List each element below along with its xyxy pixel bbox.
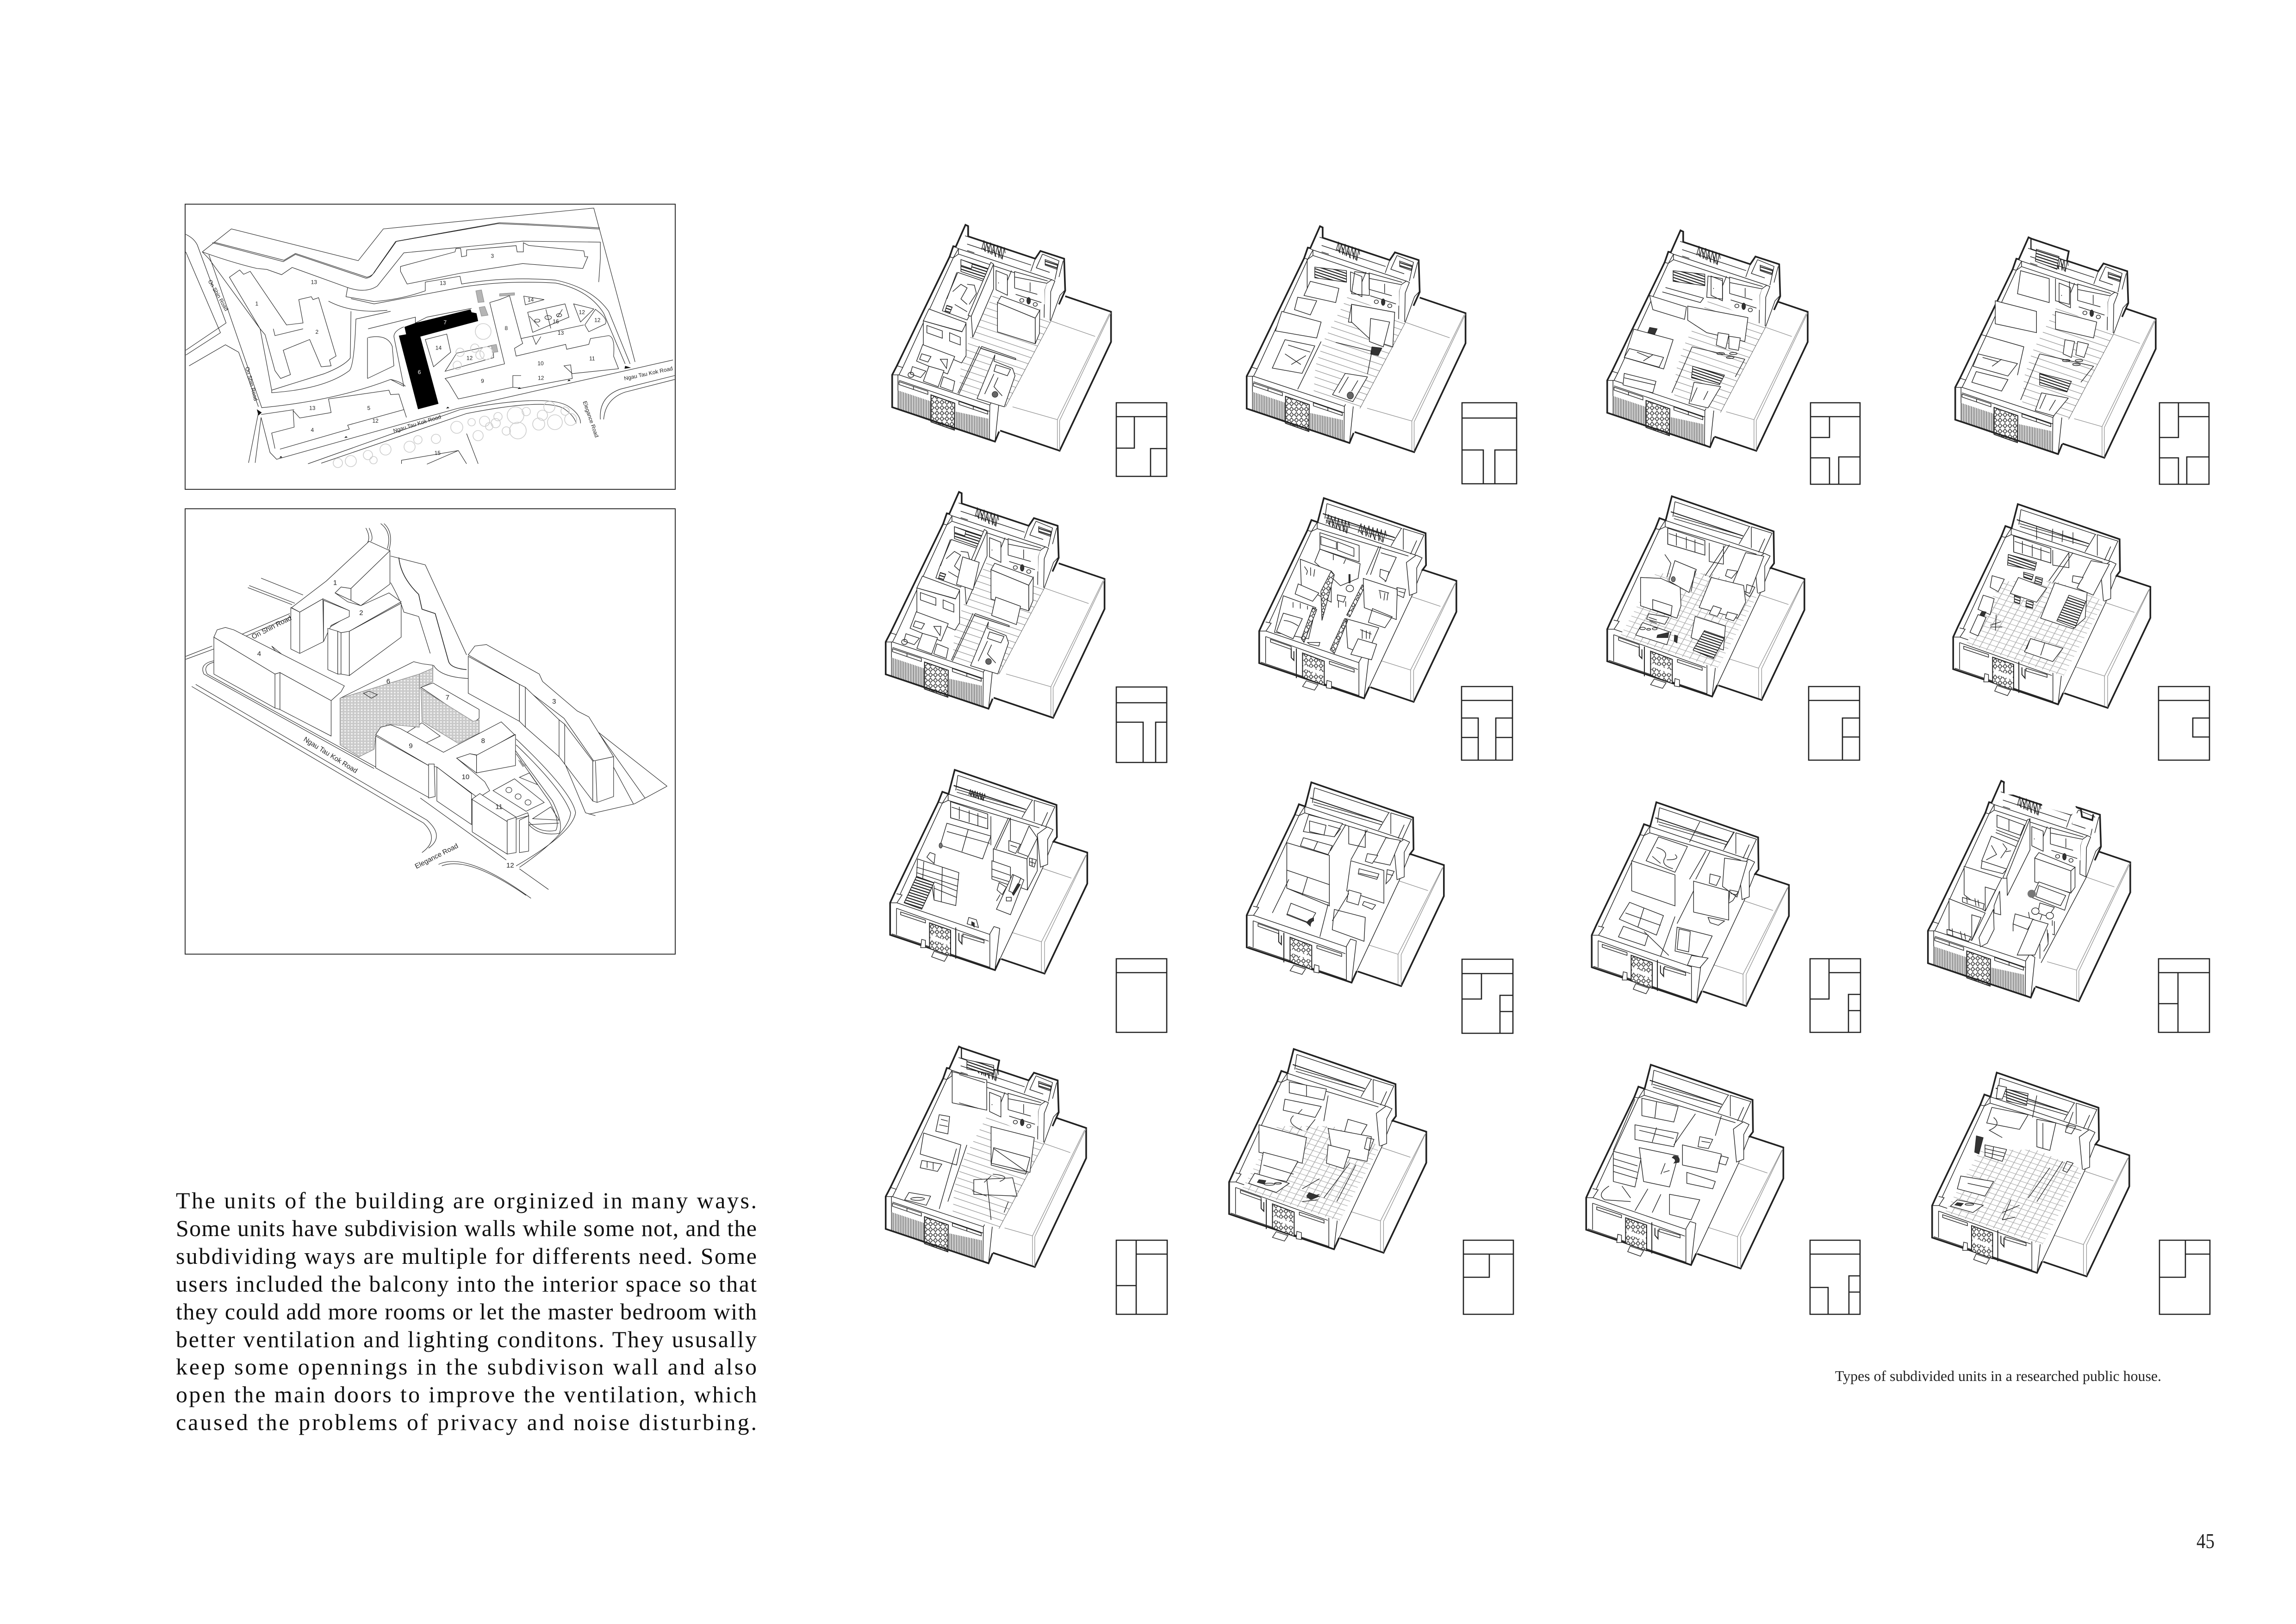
unit 6 axonometric [1259,498,1456,702]
site plan labels: 4 [311,427,314,433]
unit 14 axonometric [1229,1049,1426,1253]
aerial labels: 1 [333,579,337,587]
site plan labels: 6 [418,369,421,375]
unit 9 axonometric [890,770,1087,974]
text block: description of unit organisation [176,1187,757,1435]
aerial block 4 [214,627,344,736]
text block: description of unit organisation: subdividing ways are multiple for differents need. Some [176,1243,757,1269]
unit 1 axonometric [892,225,1111,451]
unit 11 plan [1810,959,1860,1032]
unit 13 plan [1116,1240,1167,1314]
unit 3 plan [1811,403,1860,484]
site plan labels: 12 [467,355,473,362]
panel: aerial axonometric of estate [185,509,675,954]
unit 13 axonometric [886,1047,1086,1267]
unit 4 axonometric [1955,237,2156,458]
text block: description of unit organisation: users included the balcony into the interior space so that [176,1271,757,1297]
unit 3 axonometric [1607,231,1808,451]
site plan labels: 3 [491,253,494,259]
unit 6 plan [1462,687,1512,760]
unit 12 plan [2159,959,2209,1032]
unit 7 axonometric [1607,496,1804,700]
site plan labels: 12 [594,317,601,324]
entrance arrows [257,366,631,458]
unit 1 plan [1116,403,1167,476]
aerial labels: 9 [409,742,413,750]
highlighted building block [399,309,478,409]
panel: site plan map: Elegance Road [582,400,600,438]
unit 11 axonometric [1592,802,1789,1006]
unit 8 plan [2159,687,2209,760]
site plan labels: 10 [537,360,544,367]
site plan labels: 13 [440,280,446,287]
aerial block 3 [468,644,614,802]
unit 14 plan [1463,1240,1513,1314]
unit 7 plan [1809,687,1860,760]
aerial labels: 10 [462,773,469,781]
site plan labels: 16 [553,319,559,325]
site plan labels [255,253,601,456]
aerial labels: 4 [257,650,261,658]
aerial labels: 11 [495,803,503,811]
site plan labels: 11 [589,355,595,362]
site plan labels: 12 [372,418,379,424]
text block: description of unit organisation: Some units have subdivision walls while some not, and the [176,1215,757,1241]
unit 15 plan [1810,1240,1860,1314]
site plan labels: 9 [481,378,484,384]
trees on site plan [333,324,577,468]
aerial labels: 2 [359,609,363,617]
panel: aerial axonometric of estate: Elegance Road [414,842,460,870]
site plan road and building outlines [186,208,675,464]
aerial tower blocks 1 and 2 [291,541,401,675]
unit 10 axonometric [1247,782,1444,986]
site plan labels: 14 [528,296,534,303]
unit 15 axonometric [1586,1065,1783,1268]
aerial labels: 7 [446,694,449,702]
text block: description of unit organisation: they could add more rooms or let the master bedroom with [176,1299,757,1324]
unit 2 plan [1462,403,1517,484]
panel: site plan map: On Shin Road [207,279,230,312]
aerial labels: 3 [552,698,556,706]
panel: site plan map [185,204,675,489]
aerial labels: 12 [506,862,514,869]
aerial blocks 8 to 11 [376,722,529,854]
unit 16 axonometric [1932,1073,2129,1276]
page number: 45 [2196,1529,2215,1553]
panel: aerial axonometric of estate: Ngau Tau Kok Road [302,735,359,775]
site plan labels: 12 [579,309,585,315]
site plan labels: 5 [367,405,371,412]
unit 8 axonometric [1953,504,2150,708]
text block: description of unit organisation: keep some opennings in the subdivison wall and also [176,1354,757,1380]
aerial labels: 8 [481,737,485,745]
aerial roads [186,524,667,898]
unit 16 plan [2159,1240,2210,1314]
panel: site plan map: On Shin Road [244,366,259,401]
aerial researched building 6 and 7 facade [340,662,479,757]
site plan labels: 13 [558,330,564,336]
unit 2 axonometric [1247,226,1466,452]
aerial labels [257,579,556,869]
site plan labels: 8 [504,325,508,331]
site plan labels: 14 [436,344,442,351]
panel: aerial axonometric of estate: On Shin Road [250,614,293,641]
aerial labels: 6 [386,677,390,685]
text block: description of unit organisation: The units of the building are orginized in many ways. [176,1187,757,1213]
site plan labels: 13 [309,405,316,412]
unit 12 axonometric [1928,781,2130,1001]
unit 5 plan [1116,687,1167,762]
text block: description of unit organisation: better ventilation and lighting conditons. They ususally [176,1326,757,1352]
site plan labels: 13 [311,279,317,286]
unit 5 axonometric [886,492,1105,718]
text block: description of unit organisation: caused the problems of privacy and noise disturbing. [176,1409,757,1435]
panel: site plan map: Ngau Tau Kok Road [392,413,442,434]
unit 10 plan [1462,959,1513,1033]
panel: site plan map: Ngau Tau Kok Road [623,365,673,382]
site plan labels: 1 [255,300,259,307]
site plan labels: 12 [538,375,544,381]
caption: Types of subdivided units in a researched public house. [1835,1368,2161,1384]
site plan labels: 7 [443,319,447,326]
unit 9 plan [1116,959,1167,1032]
site plan labels: 2 [315,329,318,335]
unit 4 plan [2159,403,2209,484]
text block: description of unit organisation: open the main doors to improve the ventilation, which [176,1381,757,1407]
site plan labels: 15 [435,450,441,456]
